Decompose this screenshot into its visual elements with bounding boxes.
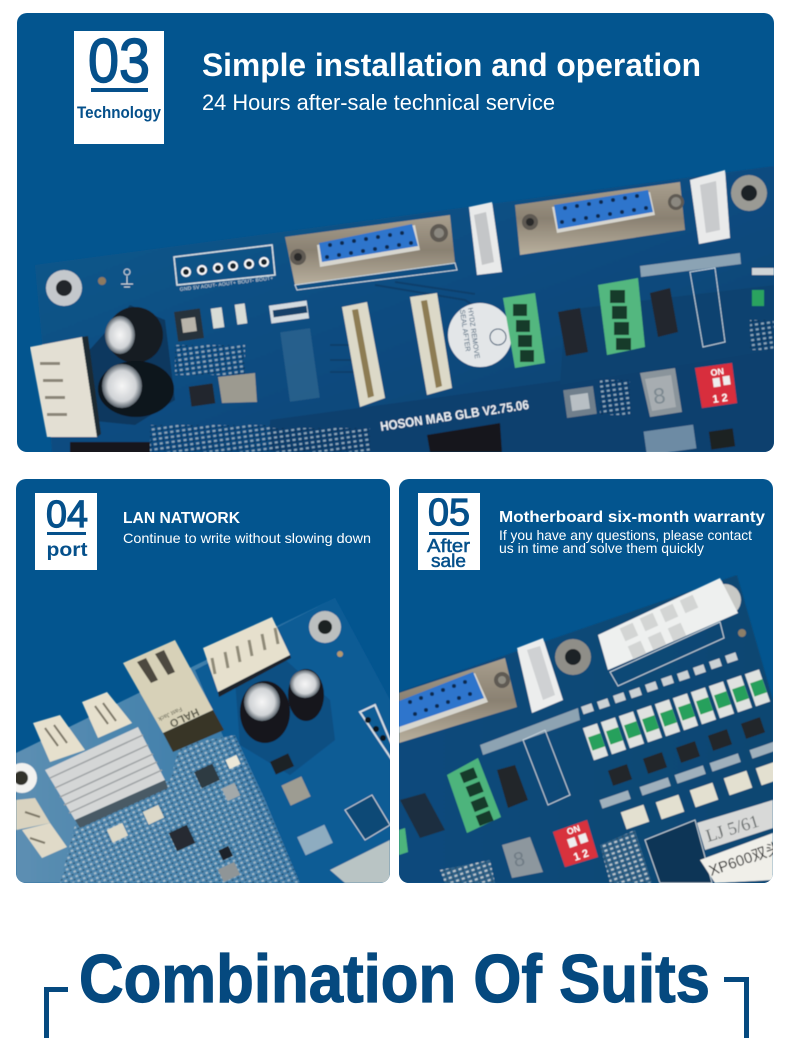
sticker labels: XP600双头 (707, 839, 783, 880)
logic ICs (558, 253, 774, 356)
chips and modules (107, 753, 311, 882)
badge 04: port (46, 540, 88, 561)
panel: LAN port (7, 479, 392, 883)
resistor packs (600, 740, 781, 809)
LED row and green fuses (581, 652, 770, 760)
description (499, 527, 752, 556)
resistor strip (480, 708, 580, 755)
circuit board photo: main board (30, 166, 774, 455)
circuit board photo: output section (399, 575, 784, 883)
heading: Motherboard six-month warranty (499, 509, 765, 526)
buzzer: SEAL AFTER (458, 309, 471, 352)
DIP switch: ON (710, 366, 725, 378)
white connector top (203, 617, 291, 697)
circuit board photo: LAN section (7, 598, 392, 883)
DIP switch (553, 820, 598, 867)
header block J39 (174, 245, 275, 293)
sticker labels: LJ 5/61 (703, 811, 761, 846)
heatsink (45, 727, 168, 828)
optocouplers (621, 761, 784, 829)
DIP switch: 1 2 (572, 848, 590, 864)
seven segment display (502, 837, 543, 878)
seven segment display (640, 368, 682, 417)
connector J23 (690, 170, 730, 244)
panel: simple installation (17, 13, 774, 455)
badge 05: 05 (428, 492, 470, 534)
main chip (427, 423, 502, 452)
RJ45 jack: Fast Jack (156, 705, 183, 722)
left bracket (46, 990, 68, 1038)
D-sub connector (399, 658, 517, 743)
sticker labels (697, 800, 783, 883)
panel: warranty (399, 479, 784, 883)
connector J22 (469, 202, 502, 275)
badge 05: After (427, 536, 470, 556)
capacitors (98, 307, 174, 417)
badge 04: 04 (46, 494, 88, 536)
mounting holes (7, 611, 341, 793)
badge 05: sale (431, 551, 466, 571)
D-sub connector J30 (515, 182, 685, 255)
RJ45 jack: HALO (167, 705, 201, 730)
badge 03: Technology (77, 103, 161, 122)
green terminal block (447, 758, 501, 833)
SOIC drivers (608, 717, 765, 786)
bottom title: Combination Of Suits (79, 941, 710, 1017)
mounting hole (555, 639, 591, 675)
subheading: 24 Hours after-sale technical service (202, 90, 555, 115)
power connector (598, 578, 741, 670)
DIP switch: ON (565, 823, 581, 837)
capacitors (240, 669, 324, 743)
logic ICs (399, 730, 570, 855)
QFP chip (563, 386, 597, 418)
small cream connectors (16, 692, 132, 858)
seven segment display: 8 (511, 848, 527, 872)
D-sub connector J18 (285, 215, 457, 290)
description: If you have any questions, please contact (499, 527, 752, 543)
board label: HOSON MAB GLB V2.75.06 (379, 397, 530, 434)
badge 03 (74, 27, 164, 144)
buzzer: HYDZ REMOVE (466, 307, 480, 359)
header block J39: GND 5V AOUT- AOUT+ BOUT- BOUT+ (180, 276, 274, 293)
chips and inductor (70, 300, 370, 454)
heading: LAN NATWORK (123, 510, 240, 527)
heading: Simple installation and operation (202, 47, 701, 83)
seven segment display: 8 (652, 383, 667, 409)
badge 04 (35, 493, 97, 570)
RJ45 jack (123, 640, 224, 752)
right bracket (724, 980, 746, 1038)
mounting hole (46, 270, 82, 306)
FFC sockets (342, 293, 452, 407)
chip under stickers (645, 820, 712, 883)
white connector (517, 638, 563, 713)
DIP switch (695, 363, 737, 408)
green terminal blocks (503, 278, 645, 368)
badge 05 (418, 492, 480, 571)
DIP switch: 1 2 (712, 392, 729, 406)
right side headers (297, 705, 392, 883)
buzzer (448, 303, 512, 367)
power connector left (30, 336, 101, 437)
description: us in time and solve them quickly (499, 540, 704, 556)
description: Continue to write without slowing down (123, 530, 371, 546)
badge 03: 03 (88, 27, 150, 96)
